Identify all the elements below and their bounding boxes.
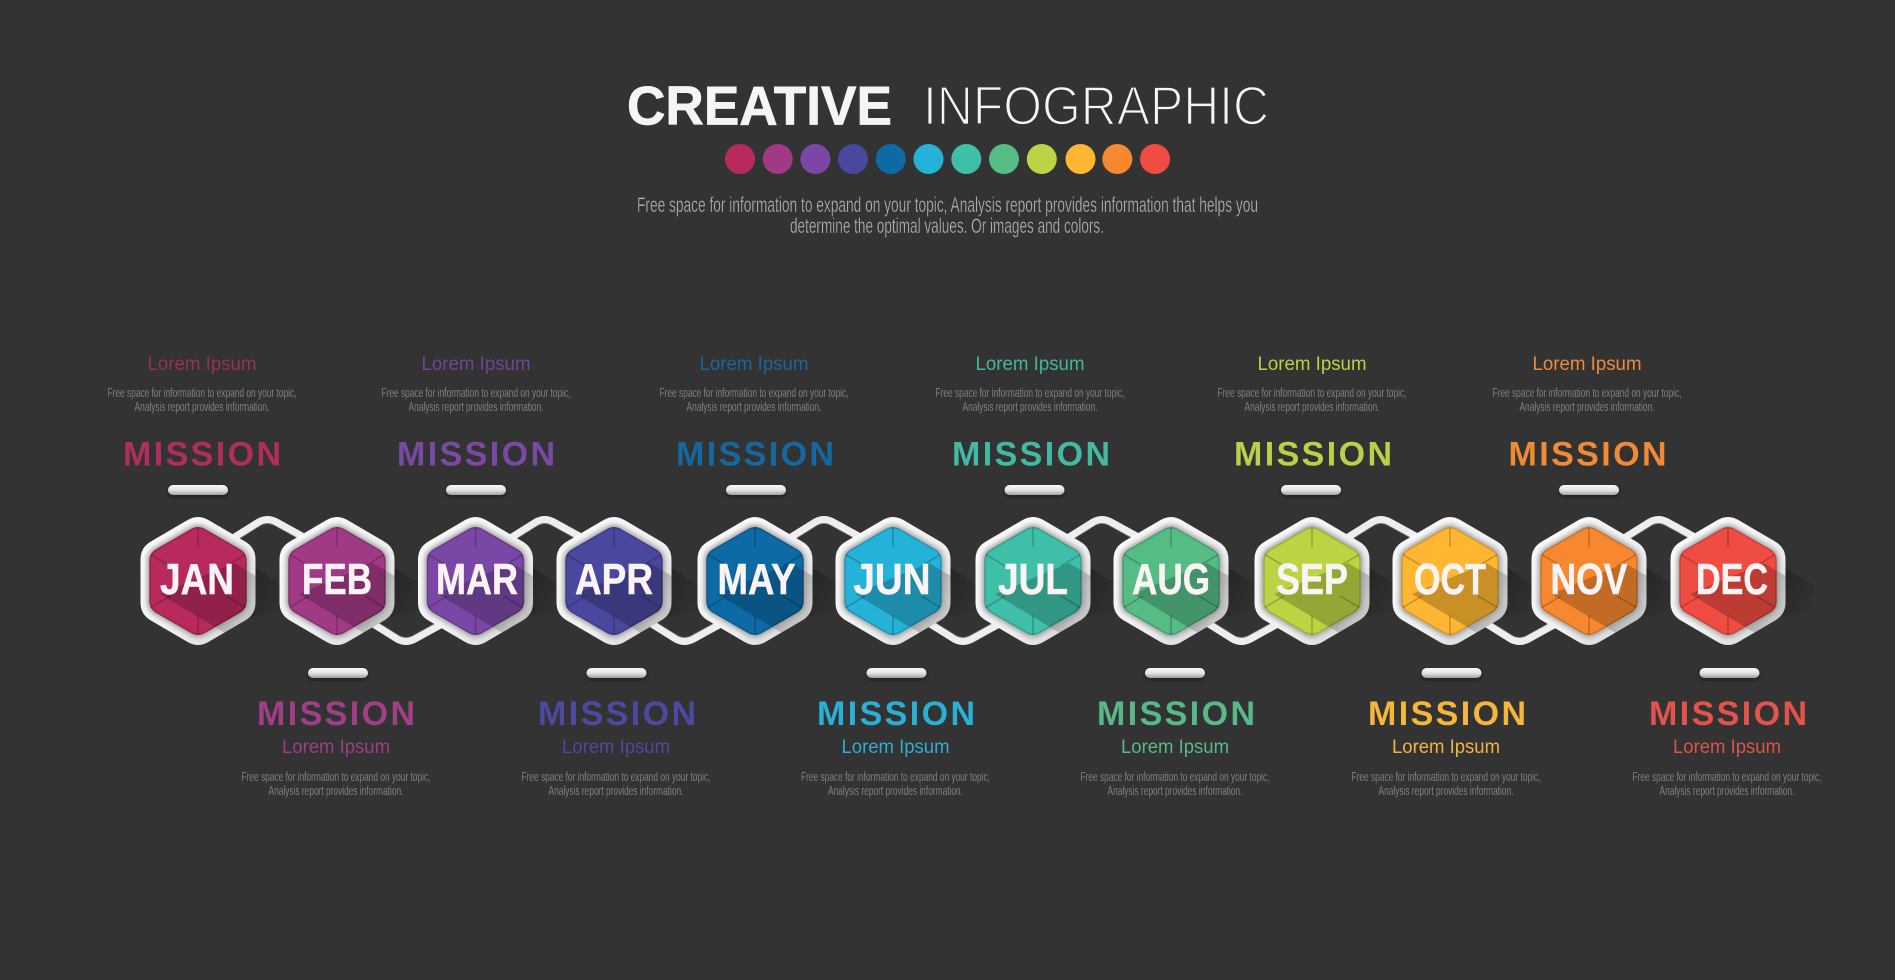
- label: AUG mission: Lorem Ipsum: [1121, 737, 1229, 758]
- label: SEP mission: Free space for information to expand on your topic,: [1218, 386, 1406, 400]
- label: APR mission: Free space for information to expand on your topic,: [522, 770, 710, 784]
- label: JUL mission: Free space for information to expand on your topic,: [936, 386, 1124, 400]
- label: JUL mission: MISSION: [952, 436, 1110, 474]
- label: OCT mission: MISSION: [1368, 695, 1526, 733]
- label: MAR mission: [382, 354, 570, 497]
- label: DEC mission: Lorem Ipsum: [1673, 737, 1781, 758]
- label: SEP mission: Lorem Ipsum: [1258, 354, 1366, 375]
- hexagon: SEP: [1254, 517, 1418, 645]
- title: INFOGRAPHIC: [923, 74, 1269, 136]
- label: NOV mission: Free space for information to expand on your topic,: [1492, 386, 1682, 400]
- hexagon: JUL: JUL: [998, 555, 1068, 604]
- label: SEP mission: [1218, 354, 1406, 497]
- hexagon: OCT: OCT: [1414, 555, 1486, 604]
- label: FEB mission: [242, 668, 430, 798]
- label: MAR mission: Free space for information to expand on your topic,: [382, 386, 570, 400]
- label: DEC mission: Analysis report provides information.: [1660, 784, 1794, 798]
- hexagon: JAN: JAN: [160, 555, 234, 604]
- hexagon: NOV: NOV: [1550, 555, 1628, 604]
- label: FEB mission: MISSION: [257, 695, 415, 733]
- label: MAY mission: [660, 354, 848, 497]
- label: JAN mission: [108, 354, 296, 497]
- label: JUN mission: MISSION: [817, 695, 975, 733]
- label: JAN mission: Free space for information to expand on your topic,: [108, 386, 296, 400]
- intro text: determine the optimal values. Or images and colors.: [790, 215, 1104, 238]
- label: AUG mission: Free space for information to expand on your topic,: [1080, 770, 1270, 784]
- hexagon: JAN: [140, 517, 304, 645]
- label: NOV mission: MISSION: [1508, 436, 1666, 474]
- hexagon: AUG: [1114, 517, 1277, 645]
- intro text: [637, 194, 1258, 238]
- label: SEP mission: Analysis report provides information.: [1244, 400, 1380, 414]
- label: JAN mission: MISSION: [123, 436, 281, 474]
- hexagon: SEP: SEP: [1276, 555, 1348, 604]
- label: MAR mission: Analysis report provides information.: [408, 400, 544, 414]
- label: JUL mission: [936, 354, 1124, 497]
- label: OCT mission: [1352, 668, 1540, 798]
- label: DEC mission: [1632, 668, 1822, 798]
- label: AUG mission: [1080, 668, 1270, 798]
- label: NOV mission: Analysis report provides information.: [1520, 400, 1654, 414]
- hexagon: MAY: [698, 517, 861, 645]
- hexagon: NOV: [1532, 517, 1695, 645]
- label: JUN mission: Lorem Ipsum: [842, 737, 950, 758]
- label: AUG mission: MISSION: [1097, 695, 1255, 733]
- label: AUG mission: Analysis report provides information.: [1108, 784, 1242, 798]
- label: APR mission: [522, 668, 710, 798]
- label: FEB mission: Free space for information to expand on your topic,: [242, 770, 430, 784]
- label: APR mission: Lorem Ipsum: [562, 737, 670, 758]
- label: NOV mission: Lorem Ipsum: [1532, 354, 1642, 375]
- hexagon: APR: [556, 517, 720, 645]
- label: JUL mission: Analysis report provides information.: [962, 400, 1098, 414]
- label: MAR mission: Lorem Ipsum: [422, 354, 530, 375]
- label: JAN mission: Lorem Ipsum: [148, 354, 256, 375]
- label: JUN mission: Analysis report provides information.: [828, 784, 963, 798]
- label: MAY mission: Free space for information to expand on your topic,: [660, 386, 848, 400]
- label: OCT mission: Free space for information to expand on your topic,: [1352, 770, 1540, 784]
- label: MAY mission: MISSION: [676, 436, 834, 474]
- label: JUN mission: [801, 668, 990, 798]
- label: DEC mission: MISSION: [1649, 695, 1807, 733]
- hexagon: MAR: MAR: [436, 555, 518, 604]
- long shadows: [238, 557, 1816, 617]
- title: CREATIVE: [627, 74, 892, 136]
- label: JUN mission: Free space for information to expand on your topic,: [801, 770, 990, 784]
- hexagon: APR: APR: [575, 555, 653, 604]
- hexagon: MAR: [418, 517, 582, 645]
- label: APR mission: Analysis report provides information.: [548, 784, 684, 798]
- label: FEB mission: Lorem Ipsum: [282, 737, 390, 758]
- hexagon: FEB: [280, 517, 443, 645]
- hexagon: JUL: [976, 517, 1139, 645]
- hexagon: JUN: JUN: [854, 555, 930, 604]
- label: OCT mission: Analysis report provides information.: [1378, 784, 1514, 798]
- label: FEB mission: Analysis report provides information.: [268, 784, 404, 798]
- hexagon: JUN: [836, 517, 999, 645]
- hexagon: MAY: MAY: [718, 555, 796, 604]
- label: NOV mission: [1492, 354, 1682, 497]
- label: OCT mission: Lorem Ipsum: [1392, 737, 1500, 758]
- label: SEP mission: MISSION: [1234, 436, 1392, 474]
- label: MAY mission: Lorem Ipsum: [700, 354, 808, 375]
- label: JUL mission: Lorem Ipsum: [976, 354, 1084, 375]
- title: [627, 74, 1269, 136]
- label: JAN mission: Analysis report provides information.: [134, 400, 270, 414]
- colour dots row: [725, 144, 1170, 174]
- hexagon: FEB: FEB: [302, 555, 372, 604]
- intro text: Free space for information to expand on your topic, Analysis report provides information that helps you: [637, 194, 1258, 217]
- hexagon: AUG: AUG: [1132, 555, 1210, 604]
- label: MAR mission: MISSION: [397, 436, 555, 474]
- label: APR mission: MISSION: [538, 695, 696, 733]
- label: MAY mission: Analysis report provides information.: [686, 400, 822, 414]
- hexagon: OCT: [1392, 517, 1556, 645]
- hexagon: DEC: DEC: [1696, 555, 1768, 604]
- hexagon: DEC: [1670, 517, 1834, 645]
- connectors: [232, 520, 1696, 642]
